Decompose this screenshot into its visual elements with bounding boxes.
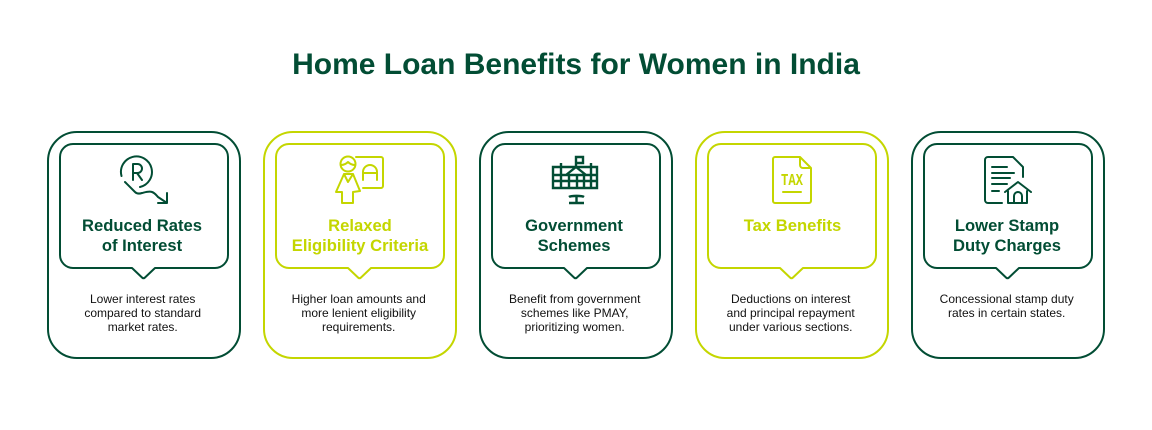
heading: Eligibility Criteria <box>292 236 428 254</box>
panel: relaxed eligibility <box>263 131 457 359</box>
text block: under various sections. <box>729 320 852 334</box>
text block: prioritizing women. <box>525 320 625 334</box>
heading <box>953 216 1061 254</box>
text block: Benefit from government <box>509 292 640 306</box>
panel: tax benefits: TAX <box>781 172 804 191</box>
panel: government schemes <box>479 131 673 359</box>
heading: Duty Charges <box>953 236 1061 254</box>
text block: more lenient eligibility <box>301 306 416 320</box>
text block <box>509 292 640 334</box>
heading: Lower Stamp <box>955 216 1059 234</box>
text block: Deductions on interest <box>731 292 850 306</box>
text block: Concessional stamp duty <box>940 292 1074 306</box>
text block: and principal repayment <box>727 306 855 320</box>
text block: compared to standard <box>84 306 201 320</box>
heading: Tax Benefits <box>744 216 841 234</box>
text block: Higher loan amounts and <box>292 292 426 306</box>
heading <box>82 216 202 254</box>
panel: reduced rates <box>47 131 241 359</box>
text block: requirements. <box>322 320 395 334</box>
text block: market rates. <box>108 320 178 334</box>
heading: Reduced Rates <box>82 216 202 234</box>
panel: stamp duty <box>911 131 1105 359</box>
heading: Relaxed <box>328 216 392 234</box>
text block <box>940 292 1074 320</box>
heading: of Interest <box>102 236 182 254</box>
text block: rates in certain states. <box>948 306 1065 320</box>
heading <box>525 216 623 254</box>
panel: tax benefits <box>695 131 889 359</box>
text block <box>84 292 201 334</box>
text block <box>727 292 855 334</box>
heading: Government <box>525 216 623 234</box>
text block <box>292 292 426 334</box>
heading: Schemes <box>538 236 610 254</box>
heading <box>292 216 428 254</box>
text block: schemes like PMAY, <box>521 306 628 320</box>
title: Home Loan Benefits for Women in India <box>292 48 860 81</box>
text block: Lower interest rates <box>90 292 195 306</box>
